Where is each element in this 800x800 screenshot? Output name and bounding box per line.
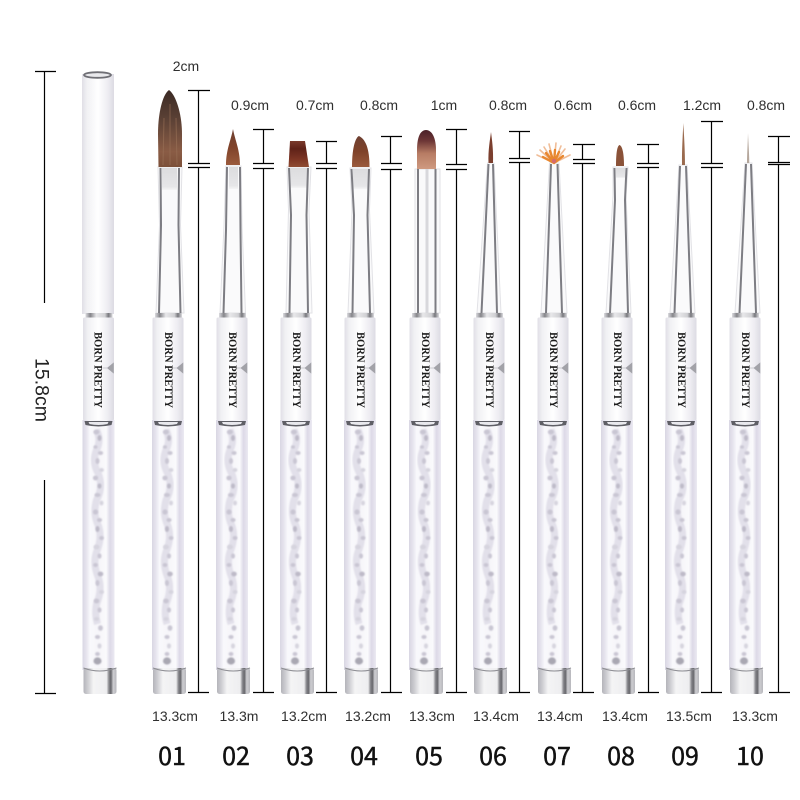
brush numbers: 06: [479, 737, 507, 773]
handle length labels: 13.3m: [220, 708, 258, 724]
cap body: [82, 74, 114, 314]
hair length labels: 0.8cm: [489, 97, 527, 113]
brush numbers: 05: [415, 737, 443, 773]
hair length labels: 0.9cm: [231, 97, 269, 113]
handle length labels: 13.3cm: [409, 708, 455, 724]
brush 07 with fan tip: BORN PRETTY: [547, 332, 559, 409]
brush 10: [729, 133, 763, 694]
brush numbers: [158, 737, 764, 773]
brush 05: BORN PRETTY: [419, 332, 431, 409]
brush numbers: 08: [607, 737, 635, 773]
pen handle with brand: [82, 313, 116, 694]
full pen with cap: overall length: [82, 72, 116, 694]
brush numbers: 01: [158, 737, 186, 773]
hair length labels: 0.8cm: [747, 97, 785, 113]
brush 01: [152, 90, 186, 694]
brush 03: BORN PRETTY: [290, 332, 302, 409]
brush 01: BORN PRETTY: [162, 332, 174, 409]
brush 09: BORN PRETTY: [675, 332, 687, 409]
hair length labels: [173, 58, 785, 113]
dimension: overall length 15.8cm: [30, 72, 56, 694]
handle length labels: 13.4cm: [602, 708, 648, 724]
handle length labels: [152, 708, 778, 724]
handle length labels: 13.2cm: [345, 708, 391, 724]
handle length labels: 13.4cm: [537, 708, 583, 724]
brush 06: [473, 132, 507, 694]
hair length labels: 0.6cm: [618, 97, 656, 113]
brush 06: BORN PRETTY: [483, 332, 495, 409]
handle length labels: 13.3cm: [732, 708, 778, 724]
brush 05: [409, 130, 443, 694]
cap rim: [84, 72, 111, 78]
brush numbers: 03: [286, 737, 314, 773]
brush numbers: 10: [736, 737, 764, 773]
hair length labels: 2cm: [173, 58, 199, 74]
brush 08: [601, 145, 635, 694]
brush 02: [216, 129, 250, 694]
brush numbers: 09: [671, 737, 699, 773]
hair length labels: 1.2cm: [683, 97, 721, 113]
handle length labels: 13.4cm: [473, 708, 519, 724]
hair length labels: 0.7cm: [296, 97, 334, 113]
dimension lines for brush hair and handle lengths: [188, 90, 790, 692]
brush 10: BORN PRETTY: [739, 332, 751, 409]
hair length labels: 1cm: [431, 97, 457, 113]
brush 09: [665, 123, 699, 694]
dimension: overall length 15.8cm: 15.8cm: [30, 358, 52, 422]
handle length labels: 13.3cm: [152, 708, 198, 724]
brush 02: BORN PRETTY: [226, 332, 238, 409]
brush 04: [344, 136, 378, 694]
brush 04: BORN PRETTY: [354, 332, 366, 409]
handle length labels: 13.2cm: [281, 708, 327, 724]
brush numbers: 02: [222, 737, 250, 773]
handle length labels: 13.5cm: [666, 708, 712, 724]
brush 03: [280, 141, 314, 694]
pen handle with brand: BORN PRETTY: [92, 332, 104, 409]
brush 08: BORN PRETTY: [611, 332, 623, 409]
brush numbers: 04: [350, 737, 378, 773]
fan hairs: [537, 143, 570, 163]
hair length labels: 0.8cm: [360, 97, 398, 113]
brush 07 with fan tip: [537, 143, 571, 694]
hair length labels: 0.6cm: [554, 97, 592, 113]
brush numbers: 07: [543, 737, 571, 773]
